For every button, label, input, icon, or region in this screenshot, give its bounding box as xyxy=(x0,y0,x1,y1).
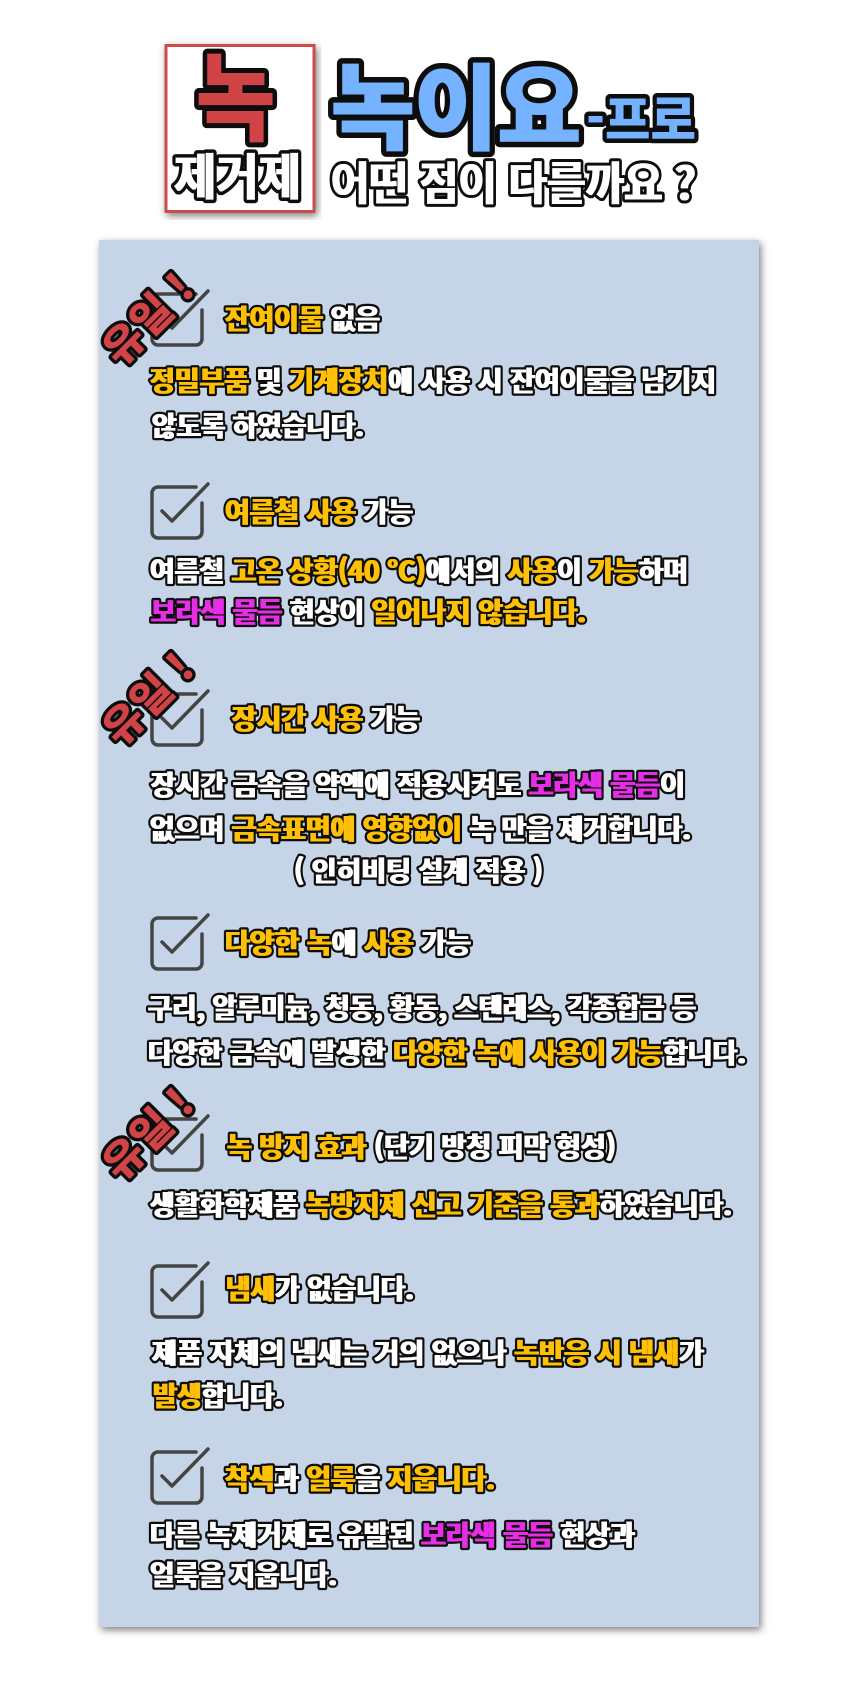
feature 1: no residue: 정밀부품 및 기계장치에 사용 시 잔여이물을 남기지 xyxy=(150,360,716,400)
product icon: red rust label: 제거제 xyxy=(174,138,301,210)
feature 1: no residue: 않도록 하였습니다. xyxy=(152,405,364,445)
feature 3: long use: 장시간 금속을 약액에 적용시켜도 보라색 물듬이 xyxy=(151,764,685,804)
feature 4: various rust: 다양한 금속에 발생한 다양한 녹에 사용이 가능합니다. xyxy=(148,1032,746,1072)
feature 1: no residue xyxy=(86,257,716,445)
feature 3: long use: 없으며 금속표면에 영향없이 녹 만을 제거합니다. xyxy=(150,808,691,848)
feature 2: summer use: 여름철 고온 상황(40 °C)에서의 사용이 가능하며 xyxy=(150,550,688,590)
product icon: red rust label: 녹 xyxy=(196,24,276,161)
title: 어떤 점이 다를까요 ? xyxy=(331,148,696,214)
feature 7: stains xyxy=(150,1449,635,1594)
feature 1: no residue: 잔여이물 없음 xyxy=(225,298,380,338)
feature 5: rust prevention xyxy=(86,1072,732,1224)
feature 5: rust prevention: 생활화학제품 녹방지제 신고 기준을 통과하였습니다. xyxy=(150,1184,732,1224)
feature 7: stains: 얼룩을 지웁니다. xyxy=(150,1554,337,1594)
feature 4: various rust: 구리, 알루미늄, 청동, 황동, 스텐레스, 각종합금 등 xyxy=(148,987,696,1027)
feature 6: odor: 제품 자체의 냄새는 거의 없으나 녹반응 시 냄새가 xyxy=(152,1332,704,1372)
product icon: red rust label xyxy=(166,24,314,212)
feature 6: odor xyxy=(152,1263,704,1415)
feature 6: odor: 냄새가 없습니다. xyxy=(226,1268,414,1308)
title: -프로 xyxy=(586,79,696,154)
title: 녹이요 xyxy=(331,34,581,170)
feature 4: various rust: 다양한 녹에 사용 가능 xyxy=(225,922,471,962)
feature 7: stains: 착색과 얼룩을 지웁니다. xyxy=(225,1458,495,1498)
feature 7: stains: 다른 녹제거제로 유발된 보라색 물듬 현상과 xyxy=(150,1514,635,1554)
feature 3: long use: 장시간 사용 가능 xyxy=(232,698,420,738)
feature 3: long use: ( 인히비팅 설계 적용 ) xyxy=(294,850,543,890)
feature 6: odor: 발생합니다. xyxy=(153,1375,283,1415)
badge: unique: 유일 ! xyxy=(86,637,206,757)
feature 2: summer use xyxy=(150,484,688,631)
title xyxy=(331,34,696,214)
feature 5: rust prevention: 녹 방지 효과 (단기 방청 피막 형성) xyxy=(227,1126,616,1166)
feature 4: various rust xyxy=(148,915,746,1072)
feature 2: summer use: 보라색 물듬 현상이 일어나지 않습니다. xyxy=(151,591,586,631)
feature 3: long use xyxy=(86,637,691,890)
badge: unique: 유일 ! xyxy=(86,257,206,377)
feature 2: summer use: 여름철 사용 가능 xyxy=(225,491,413,531)
badge: unique: 유일 ! xyxy=(86,1072,206,1192)
panel: features background xyxy=(99,240,759,1627)
